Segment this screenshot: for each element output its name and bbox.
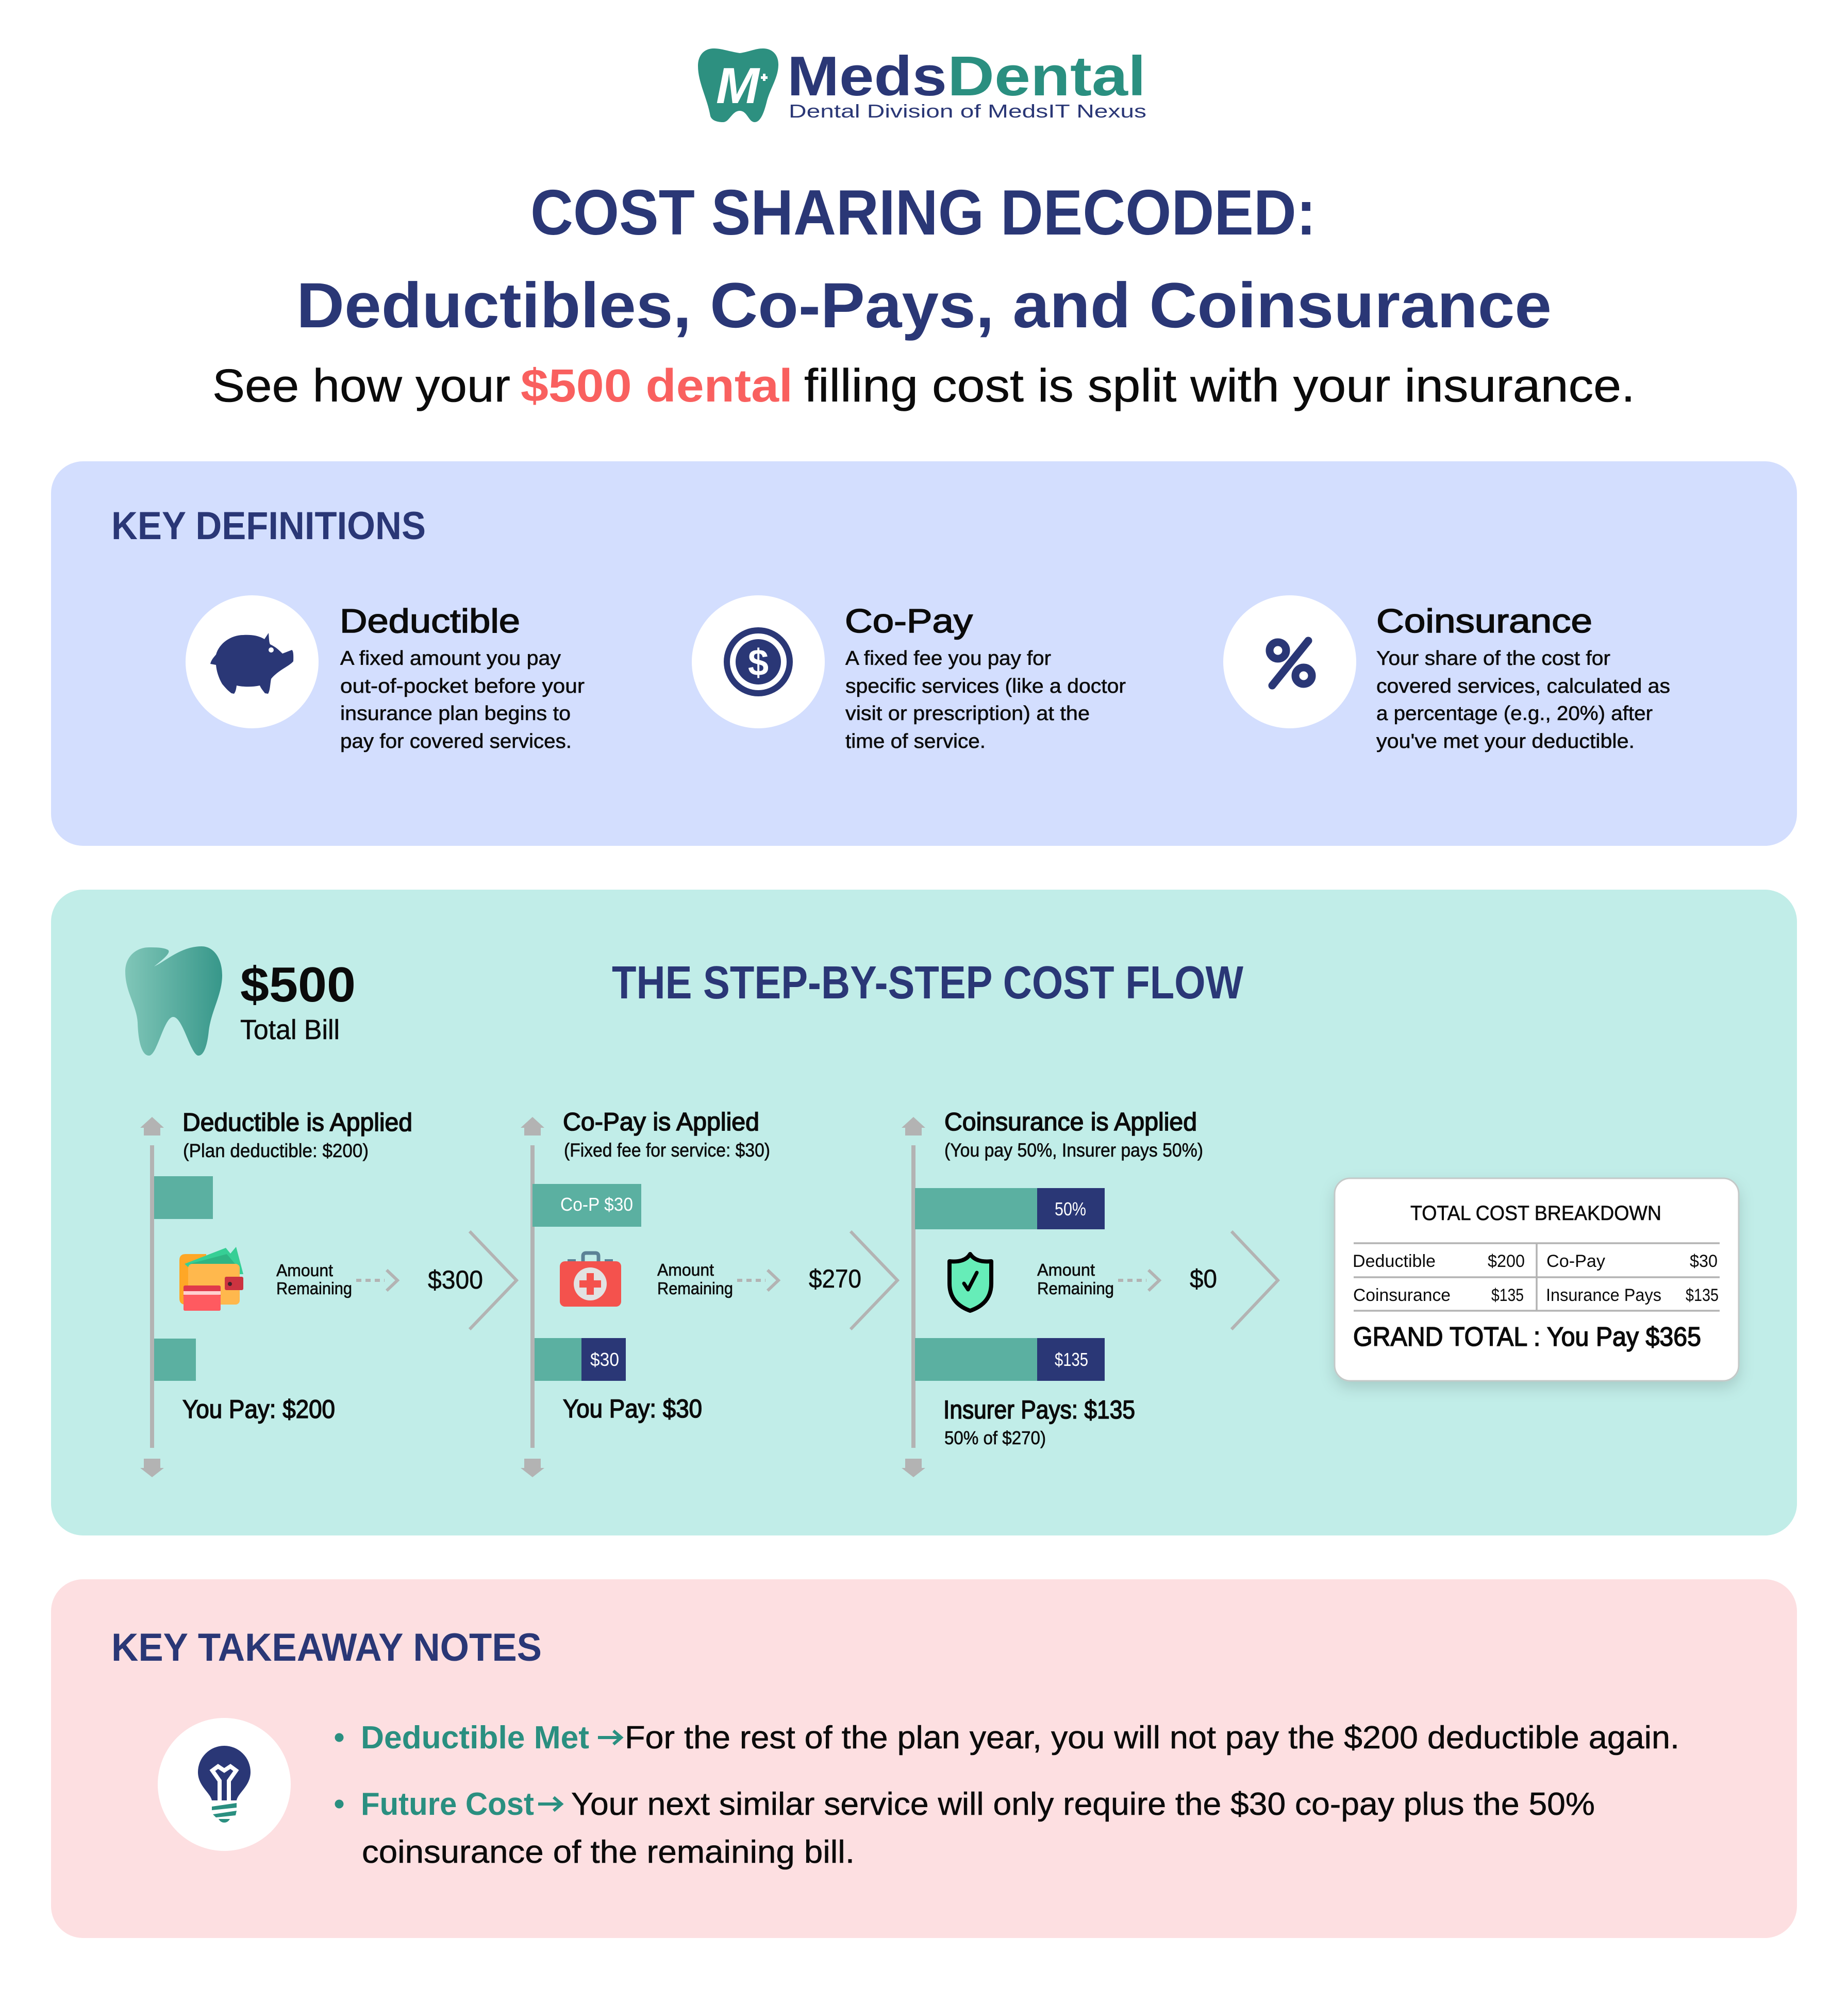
step 1 amount remaining label: Amount bbox=[276, 1261, 333, 1280]
step 2 bottom bar: $30 bbox=[590, 1349, 619, 1370]
coinsurance text: you've met your deductible. bbox=[1376, 730, 1635, 753]
icon: large tooth bbox=[125, 946, 222, 1056]
step 2 amount remaining label bbox=[657, 1260, 733, 1298]
note: deductible met: For the rest of the plan year, you will not pay the $200 deductible again. bbox=[625, 1720, 1679, 1756]
step 1 remaining value: $300 bbox=[428, 1265, 483, 1294]
step 2 bottom bar bbox=[535, 1338, 626, 1381]
step 3 bottom bar: $135 bbox=[1055, 1349, 1088, 1370]
step 2 amount remaining label: Amount bbox=[657, 1260, 714, 1279]
subtitle bbox=[212, 360, 1635, 412]
step 2 you pay: You Pay: $30 bbox=[563, 1394, 702, 1423]
icon: piggy bank bbox=[186, 595, 319, 728]
note: deductible met: Deductible Met bbox=[361, 1720, 589, 1756]
co-pay text bbox=[845, 647, 1126, 753]
icon: logo tooth: M bbox=[716, 57, 760, 114]
co-pay text: visit or prescription) at the bbox=[845, 703, 1090, 725]
deductible title: Deductible bbox=[340, 602, 520, 640]
deductible text: insurance plan begins to bbox=[340, 703, 571, 725]
step 1 axis arrow bbox=[140, 1117, 164, 1477]
breakdown table: $30 bbox=[1690, 1251, 1718, 1271]
subtitle: See how your bbox=[212, 360, 510, 412]
note: future cost bbox=[335, 1786, 1595, 1870]
step 3 amount remaining label bbox=[1037, 1260, 1114, 1298]
total bill: $500 bbox=[240, 957, 356, 1012]
step 3 chevron arrow bbox=[1231, 1231, 1278, 1329]
step 2 heading bbox=[563, 1108, 770, 1161]
co-pay title: Co-Pay bbox=[845, 602, 973, 640]
step 2: co-pay bbox=[521, 1108, 897, 1477]
deductible text: pay for covered services. bbox=[340, 730, 572, 753]
co-pay text: time of service. bbox=[845, 730, 986, 753]
definition: co-pay bbox=[692, 595, 1126, 753]
step 1 heading: (Plan deductible: $200) bbox=[183, 1140, 369, 1161]
step 3 heading: Coinsurance is Applied bbox=[944, 1108, 1197, 1136]
icon: shield bbox=[950, 1254, 991, 1311]
step 1 dashed arrow bbox=[356, 1270, 397, 1291]
step 3 insurer pays bbox=[943, 1395, 1135, 1448]
coinsurance text: covered services, calculated as bbox=[1376, 675, 1670, 697]
title: COST SHARING DECODED: bbox=[530, 177, 1316, 248]
step 3 heading bbox=[944, 1108, 1203, 1161]
step 2 top bar: Co-P $30 bbox=[560, 1194, 633, 1215]
icon: percent bbox=[1223, 595, 1356, 728]
definition: coinsurance bbox=[1223, 595, 1670, 753]
step 3 amount remaining label: Remaining bbox=[1037, 1279, 1114, 1298]
coinsurance text: a percentage (e.g., 20%) after bbox=[1376, 703, 1653, 725]
co-pay text: A fixed fee you pay for bbox=[845, 647, 1051, 670]
step 1 heading bbox=[182, 1109, 412, 1161]
step 1 chevron arrow bbox=[470, 1231, 517, 1329]
logo bbox=[698, 45, 1146, 122]
definition: deductible bbox=[186, 595, 585, 753]
coinsurance title: Coinsurance bbox=[1376, 602, 1592, 640]
deductible text bbox=[340, 647, 585, 753]
panel: key takeaway notes bbox=[51, 1579, 1797, 1938]
title bbox=[296, 177, 1552, 341]
step 3 top bar: 50% bbox=[1055, 1198, 1086, 1220]
heading: cost flow: THE STEP-BY-STEP COST FLOW bbox=[612, 957, 1243, 1009]
card heading: TOTAL COST BREAKDOWN bbox=[1410, 1202, 1661, 1225]
co-pay text: specific services (like a doctor bbox=[845, 675, 1126, 697]
step 3 amount remaining label: Amount bbox=[1037, 1260, 1095, 1279]
step 2 axis arrow bbox=[521, 1117, 544, 1477]
heading: key takeaway notes: KEY TAKEAWAY NOTES bbox=[111, 1626, 542, 1669]
icon: medical kit bbox=[560, 1253, 621, 1307]
card: total cost breakdown bbox=[1335, 1178, 1739, 1381]
step 3 insurer pays: Insurer Pays: $135 bbox=[943, 1395, 1135, 1424]
panel: key definitions bbox=[51, 461, 1797, 846]
breakdown table: Coinsurance bbox=[1353, 1285, 1451, 1305]
panel: step-by-step cost flow bbox=[51, 890, 1797, 1535]
coinsurance text: Your share of the cost for bbox=[1376, 647, 1610, 670]
step 3 bottom bar bbox=[915, 1338, 1105, 1381]
step 3 axis arrow bbox=[902, 1117, 925, 1477]
logo wordmark: Dental bbox=[947, 45, 1146, 108]
step 1 you pay: You Pay: $200 bbox=[182, 1395, 335, 1424]
step 1 top bar bbox=[154, 1176, 213, 1219]
step 3: coinsurance bbox=[902, 1108, 1278, 1477]
step 2 amount remaining label: Remaining bbox=[657, 1279, 733, 1298]
step 1 amount remaining label bbox=[276, 1261, 352, 1298]
step 1 amount remaining label: Remaining bbox=[276, 1279, 352, 1298]
step 1: deductible bbox=[140, 1109, 517, 1477]
subtitle: $500 dental bbox=[521, 360, 793, 412]
step 2 heading: (Fixed fee for service: $30) bbox=[564, 1140, 770, 1161]
coinsurance text bbox=[1376, 647, 1670, 753]
step 3 top bar bbox=[915, 1188, 1105, 1229]
breakdown table: Deductible bbox=[1353, 1251, 1436, 1271]
subtitle: filling cost is split with your insurance. bbox=[804, 360, 1635, 412]
breakdown table bbox=[1353, 1243, 1720, 1311]
note: future cost: Your next similar service will only require the $30 co-pay plus the 50% bbox=[571, 1786, 1595, 1822]
title: Deductibles, Co-Pays, and Coinsurance bbox=[296, 270, 1552, 341]
heading: key definitions: KEY DEFINITIONS bbox=[111, 504, 426, 548]
step 2 top bar bbox=[532, 1184, 641, 1227]
breakdown table: $135 bbox=[1686, 1285, 1719, 1305]
step 2 chevron arrow bbox=[851, 1231, 897, 1329]
step 1 bottom bar bbox=[154, 1339, 196, 1381]
breakdown table: Co-Pay bbox=[1546, 1251, 1605, 1271]
icon: wallet bbox=[179, 1247, 243, 1311]
step 2 remaining value: $270 bbox=[809, 1264, 861, 1293]
step 3 insurer pays: 50% of $270) bbox=[944, 1427, 1046, 1448]
note: future cost: Future Cost bbox=[361, 1786, 534, 1822]
logo tagline: Dental Division of MedsIT Nexus bbox=[789, 101, 1146, 122]
step 3 heading: (You pay 50%, Insurer pays 50%) bbox=[944, 1140, 1203, 1161]
icon: light bulb bbox=[158, 1718, 291, 1851]
step 3 remaining value: $0 bbox=[1190, 1264, 1217, 1293]
deductible text: out-of-pocket before your bbox=[340, 675, 585, 697]
logo wordmark: Meds bbox=[787, 45, 947, 108]
step 2 heading: Co-Pay is Applied bbox=[563, 1108, 759, 1136]
breakdown table: $135 bbox=[1491, 1285, 1524, 1305]
deductible text: A fixed amount you pay bbox=[340, 647, 561, 670]
grand total: GRAND TOTAL : You Pay $365 bbox=[1353, 1322, 1701, 1352]
icon: logo tooth bbox=[698, 48, 778, 122]
step 1 heading: Deductible is Applied bbox=[182, 1109, 412, 1137]
step 2 dashed arrow bbox=[737, 1270, 778, 1291]
logo wordmark bbox=[787, 45, 1146, 108]
breakdown table: $200 bbox=[1488, 1251, 1525, 1271]
note: future cost: coinsurance of the remaining bill. bbox=[362, 1834, 855, 1870]
icon: dollar coin: $ bbox=[748, 642, 769, 683]
breakdown table: Insurance Pays bbox=[1546, 1285, 1661, 1305]
icon: dollar coin bbox=[692, 595, 825, 728]
total bill bbox=[240, 957, 356, 1045]
total bill: Total Bill bbox=[240, 1014, 340, 1045]
step 3 dashed arrow bbox=[1118, 1270, 1159, 1291]
